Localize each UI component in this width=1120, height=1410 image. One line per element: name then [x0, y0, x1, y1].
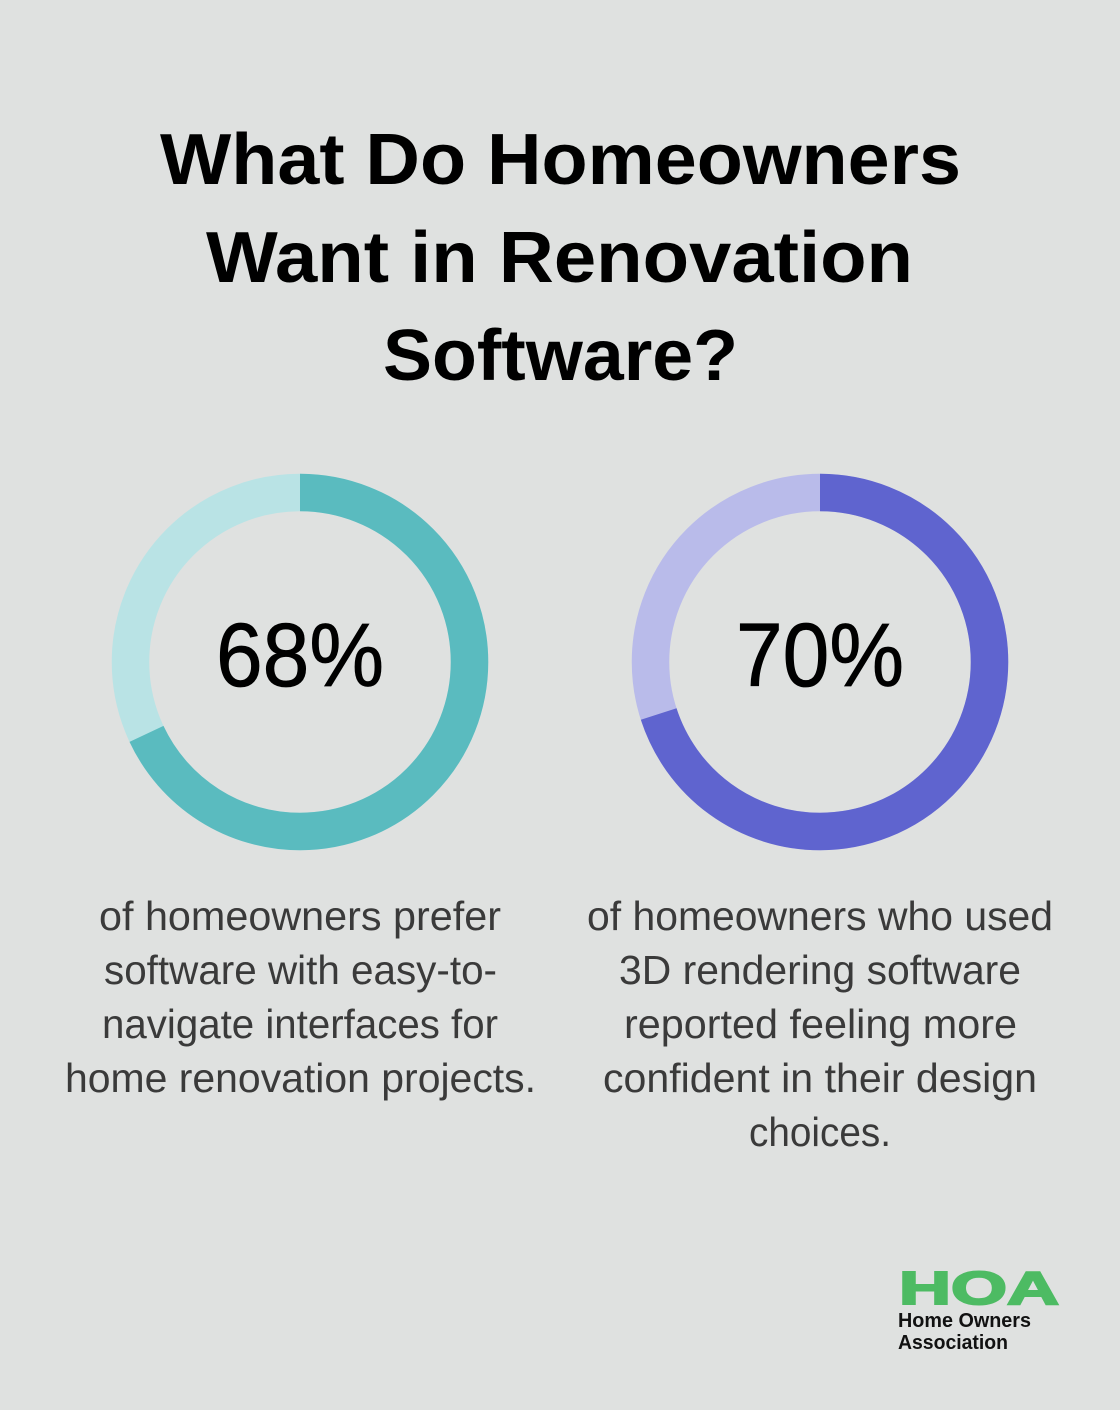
logo: HOA Home Owners Association: Home Owners [898, 1310, 1031, 1332]
donut chart: 68% [130, 492, 470, 832]
title: Software? [383, 316, 738, 396]
donut chart: 70%: 70% [736, 606, 904, 706]
title: What Do Homeowners [160, 120, 961, 200]
title: Want in Renovation [206, 218, 913, 298]
text block: 68% description: software with easy-to- [104, 947, 497, 993]
donut chart: 70% [650, 492, 990, 832]
text block: 70% description: choices. [749, 1109, 891, 1155]
donut chart: 68%: 68% [216, 606, 384, 706]
logo: HOA Home Owners Association [898, 1262, 1059, 1354]
text block: 68% description: home renovation projects. [65, 1055, 536, 1101]
text block: 70% description: reported feeling more [624, 1001, 1017, 1047]
text block: 70% description: of homeowners who used [587, 893, 1053, 939]
text block: 70% description: confident in their design [603, 1055, 1037, 1101]
text block: 68% description [65, 893, 536, 1101]
logo: HOA Home Owners Association: Association [898, 1332, 1008, 1354]
text block: 68% description: navigate interfaces for [102, 1001, 498, 1047]
text block: 70% description [587, 893, 1053, 1155]
logo: HOA Home Owners Association: HOA [899, 1262, 1059, 1314]
text block: 68% description: of homeowners prefer [99, 893, 501, 939]
text block: 70% description: 3D rendering software [619, 947, 1021, 993]
title [160, 120, 961, 396]
